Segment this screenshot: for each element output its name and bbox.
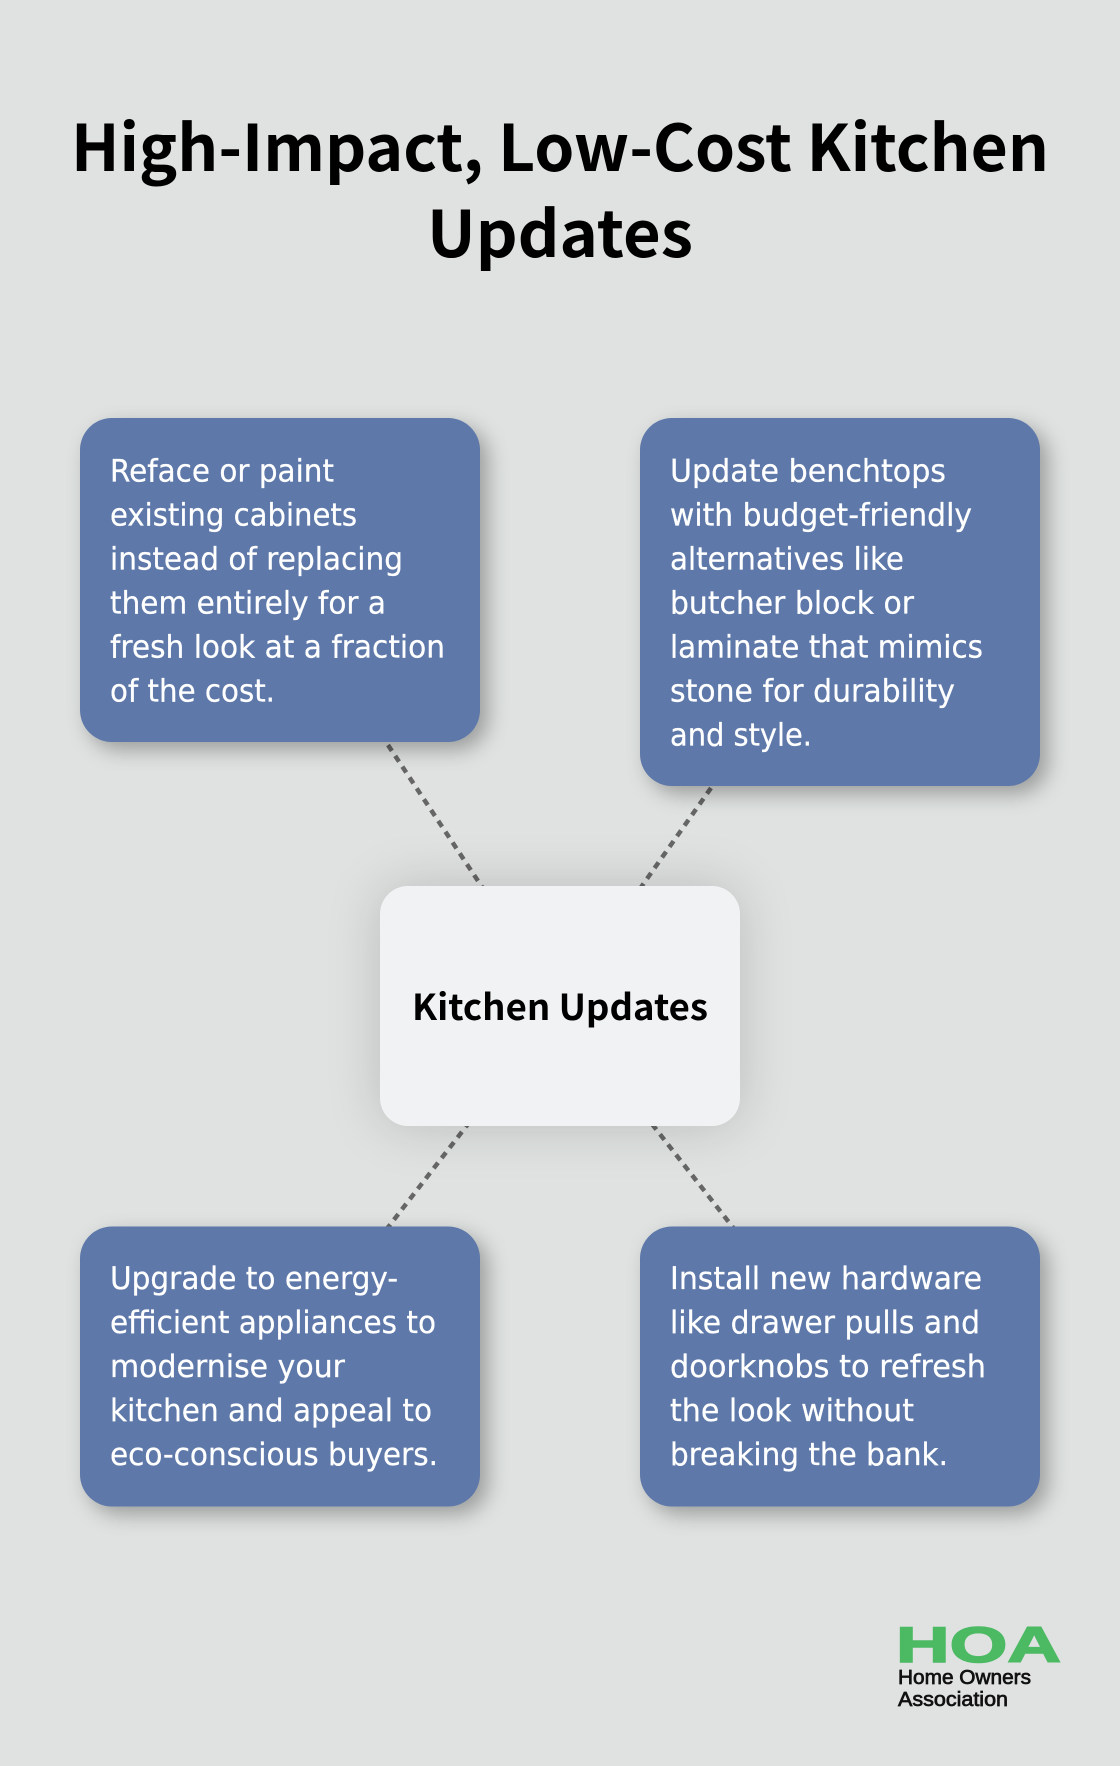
connector: top left [388,745,486,893]
panel: new hardware [640,1226,1040,1506]
title: High-Impact, Low-Cost Kitchen [71,98,1049,190]
panel: reface cabinets: instead of replacing [110,542,403,578]
panel: central node [380,886,740,1126]
panel: update benchtops: alternatives like [670,542,904,578]
panel: update benchtops: Update benchtops [670,454,946,490]
panel: reface cabinets: existing cabinets [110,498,357,534]
panel: new hardware: Install new hardware [670,1261,982,1297]
panel: new hardware: the look without [670,1393,914,1429]
panel: update benchtops: stone for durability [670,674,955,710]
panel: update benchtops: and style. [670,718,812,754]
panel: new hardware: like drawer pulls and [670,1305,980,1341]
logo: HOA Home Owners Association: Home Owners [898,1667,1031,1689]
panel: energy-efficient appliances: modernise your [110,1349,345,1385]
panel: update benchtops: with budget-friendly [670,498,972,534]
connector: bottom right [652,1124,735,1230]
logo: HOA Home Owners Association: HOA [896,1617,1061,1673]
panel: reface cabinets: of the cost. [110,674,275,710]
panel: reface cabinets: fresh look at a fraction [110,630,445,666]
panel: update benchtops [640,418,1040,786]
panel: energy-efficient appliances: efficient appliances to [110,1305,436,1341]
connector: bottom left [386,1124,468,1230]
panel: update benchtops: laminate that mimics [670,630,983,666]
panel: central node: Kitchen Updates [412,979,708,1031]
title: Updates [427,184,693,276]
panel: energy-efficient appliances [80,1226,480,1506]
panel: update benchtops: butcher block or [670,586,914,622]
panel: energy-efficient appliances: eco-conscious buyers. [110,1437,438,1473]
connector: top right [637,788,711,893]
panel: reface cabinets: them entirely for a [110,586,386,622]
panel: energy-efficient appliances: Upgrade to energy- [110,1261,398,1297]
logo: HOA Home Owners Association [896,1617,1061,1711]
title [71,98,1049,276]
panel: reface cabinets: Reface or paint [110,454,334,490]
panel: new hardware: breaking the bank. [670,1437,948,1473]
panel: reface cabinets [80,418,480,742]
panel: energy-efficient appliances: kitchen and appeal to [110,1393,432,1429]
logo: HOA Home Owners Association: Association [898,1689,1008,1711]
panel: new hardware: doorknobs to refresh [670,1349,986,1385]
